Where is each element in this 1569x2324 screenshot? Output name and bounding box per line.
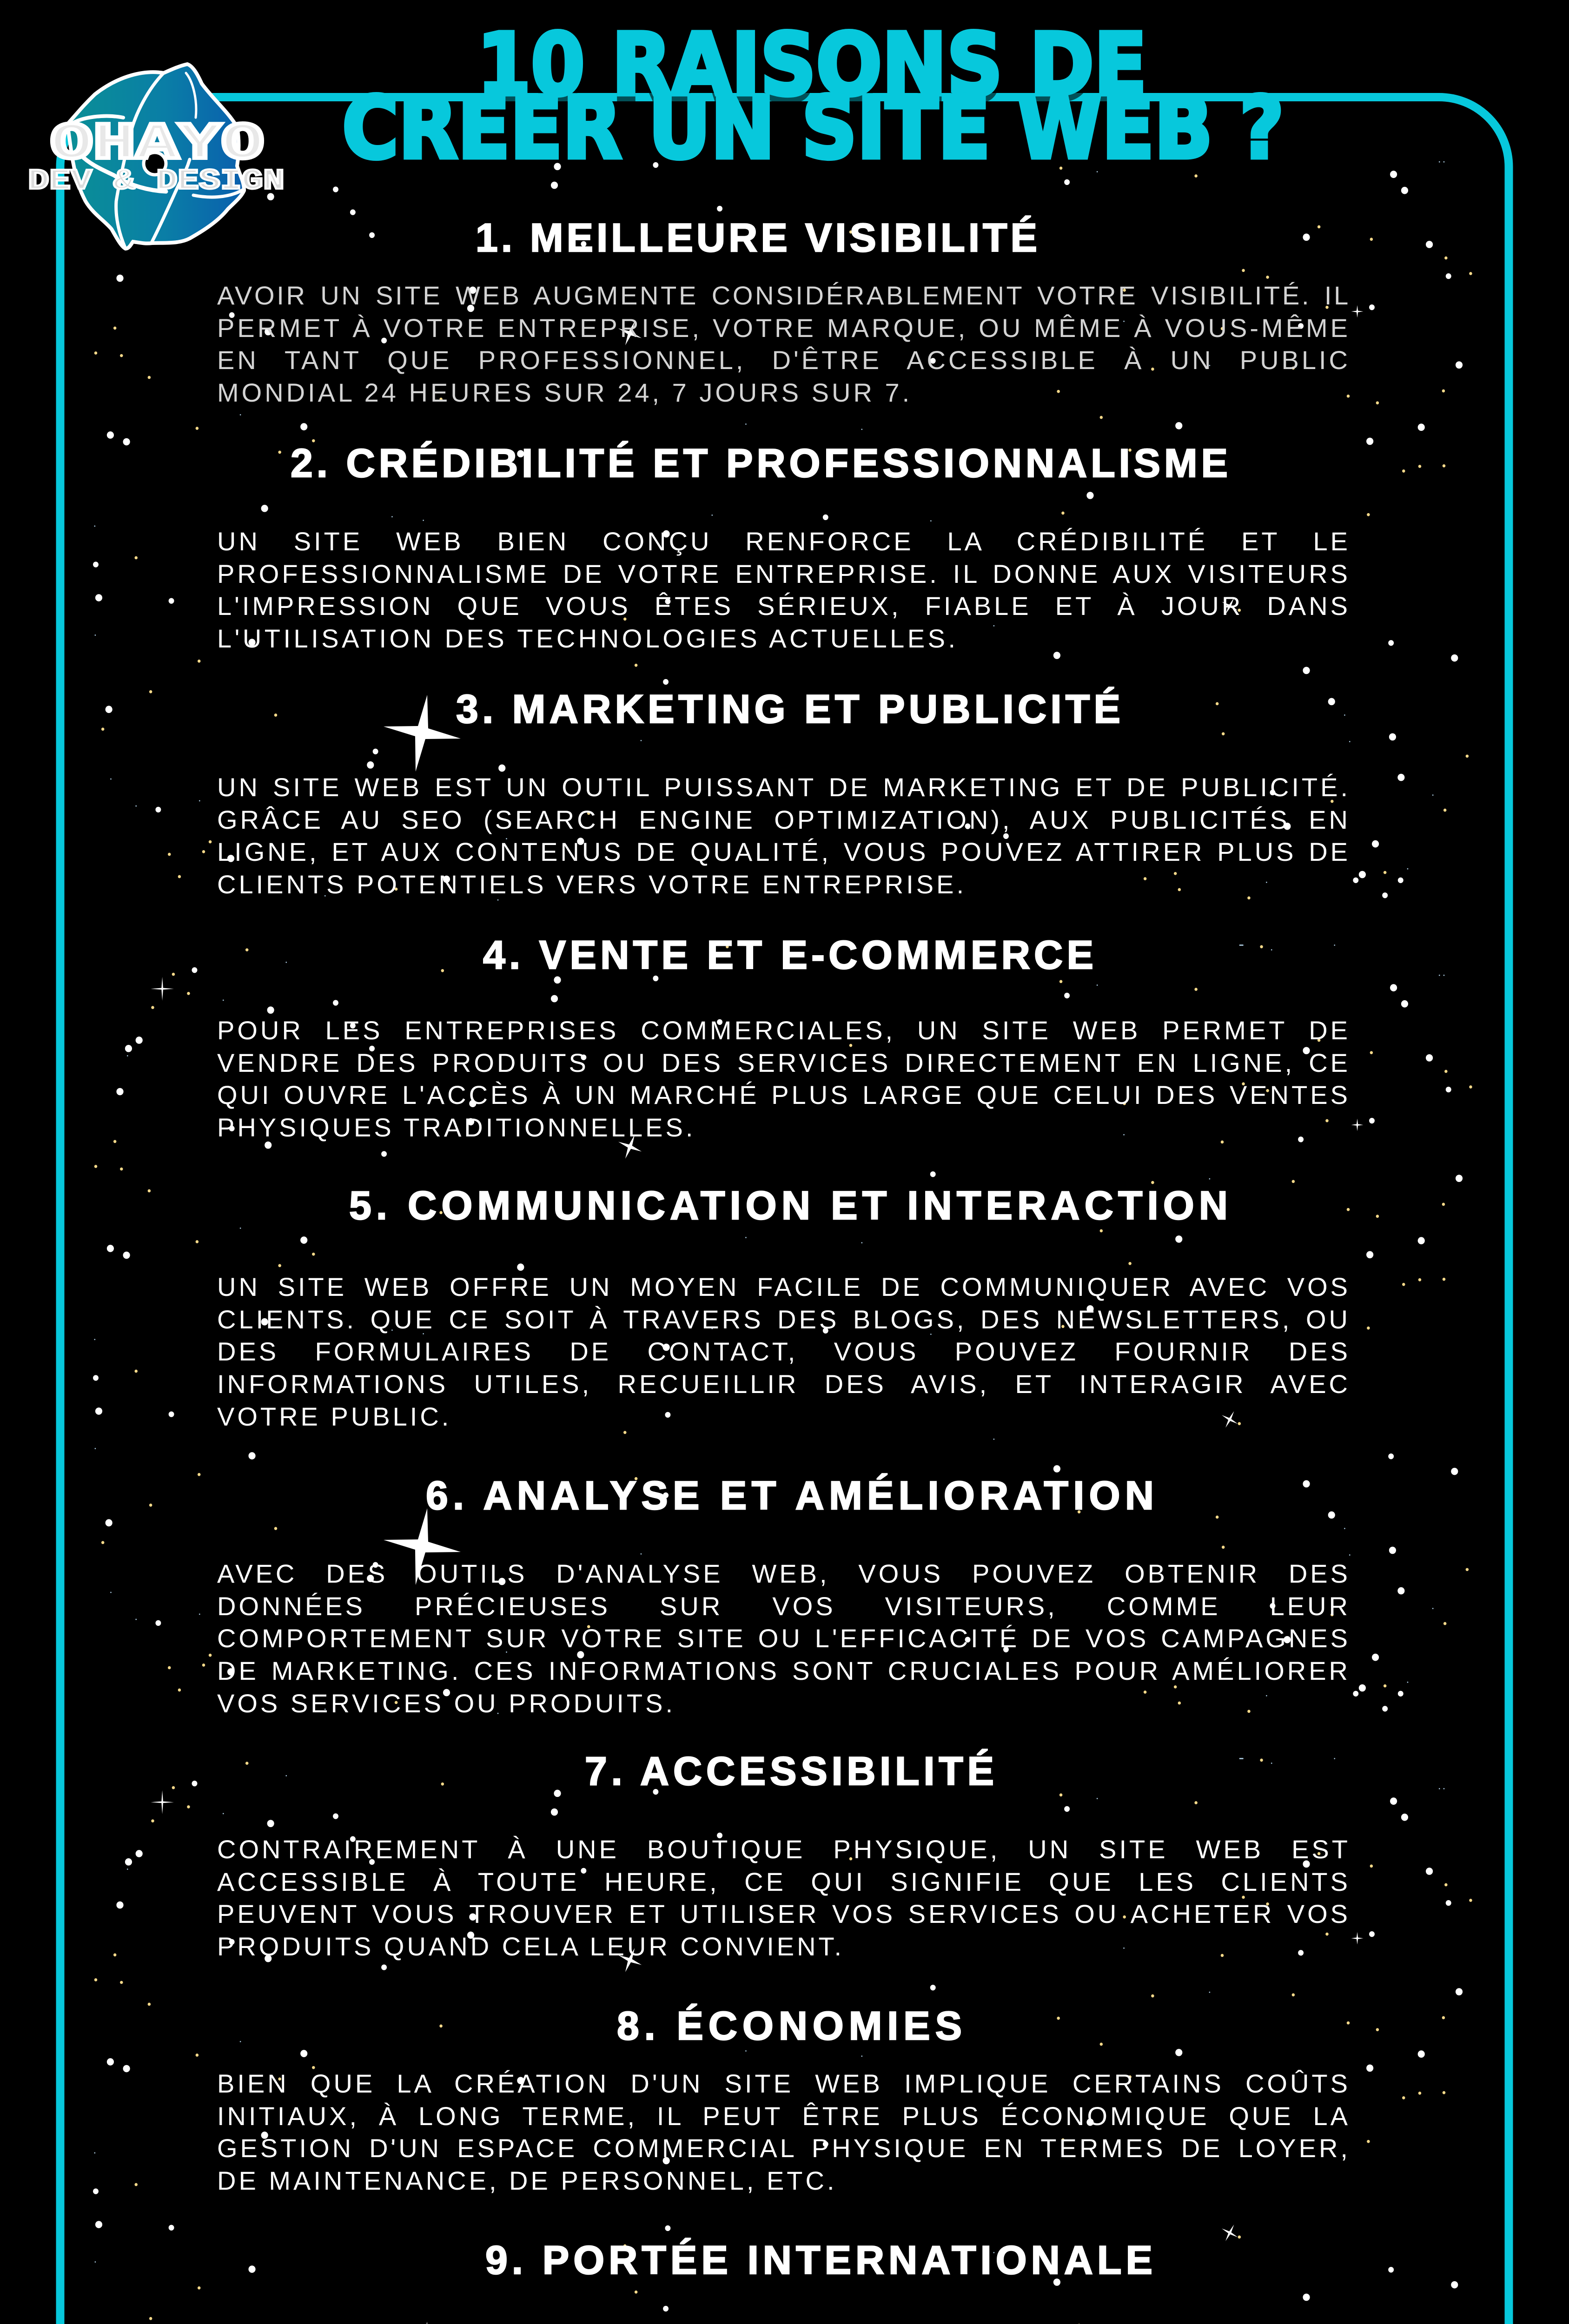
paragraph 2: UN SITE WEB BIEN CONÇU RENFORCE LA CRÉDIBILITÉ ET LE xyxy=(217,527,1351,556)
paragraph 4: POUR LES ENTREPRISES COMMERCIALES, UN SITE WEB PERMET DE xyxy=(217,1016,1351,1045)
paragraph 3: CLIENTS POTENTIELS VERS VOTRE ENTREPRISE. xyxy=(217,870,967,899)
title line 1: 10 RAISONS DE xyxy=(477,15,1147,115)
paragraph 7: PEUVENT VOUS TROUVER ET UTILISER VOS SERVICES OU ACHETER VOS xyxy=(217,1899,1351,1928)
starfield: first tile lower band xyxy=(96,945,1470,1267)
paragraph 4: PHYSIQUES TRADITIONNELLES. xyxy=(217,1113,695,1142)
heading 8: 8. ÉCONOMIES xyxy=(617,2004,962,2048)
paragraph 2: PROFESSIONNALISME DE VOTRE ENTREPRISE. IL DONNE AUX VISITEURS xyxy=(217,559,1351,588)
paragraph 4: VENDRE DES PRODUITS OU DES SERVICES DIRECTEMENT EN LIGNE, CE xyxy=(217,1048,1351,1077)
paragraph 7: CONTRAIREMENT À UNE BOUTIQUE PHYSIQUE, UN SITE WEB EST xyxy=(217,1835,1351,1864)
paragraph 5: VOTRE PUBLIC. xyxy=(217,1402,451,1431)
heading 4: 4. VENTE ET E-COMMERCE xyxy=(483,933,1093,977)
heading 3: 3. MARKETING ET PUBLICITÉ xyxy=(456,687,1120,732)
paragraph 8 xyxy=(217,2067,1351,2197)
paragraph 8: DE MAINTENANCE, DE PERSONNEL, ETC. xyxy=(217,2166,837,2195)
paragraph 8: GESTION D'UN ESPACE COMMERCIAL PHYSIQUE EN TERMES DE LOYER, xyxy=(217,2133,1351,2163)
paragraph 7: PRODUITS QUAND CELA LEUR CONVIENT. xyxy=(217,1932,844,1961)
paragraph 2: L'UTILISATION DES TECHNOLOGIES ACTUELLES. xyxy=(217,624,959,653)
paragraph 6: VOS SERVICES OU PRODUITS. xyxy=(217,1689,675,1718)
logo hole xyxy=(144,152,166,175)
logo: Ohayo globe xyxy=(28,64,285,249)
paragraph 6 xyxy=(217,1558,1351,1720)
paragraph 6: AVEC DES OUTILS D'ANALYSE WEB, VOUS POUVEZ OBTENIR DES xyxy=(217,1559,1351,1588)
paragraph 6: DE MARKETING. CES INFORMATIONS SONT CRUCIALES POUR AMÉLIORER xyxy=(217,1656,1351,1685)
paragraph 5 xyxy=(217,1271,1351,1433)
paragraph 1: MONDIAL 24 HEURES SUR 24, 7 JOURS SUR 7. xyxy=(217,378,912,407)
logo tagline: DEV & DESIGN xyxy=(28,165,285,198)
paragraph 6: COMPORTEMENT SUR VOTRE SITE OU L'EFFICACITÉ DE VOS CAMPAGNES xyxy=(217,1624,1351,1653)
paragraph 5: DES FORMULAIRES DE CONTACT, VOUS POUVEZ FOURNIR DES xyxy=(217,1337,1351,1366)
paragraph 3: UN SITE WEB EST UN OUTIL PUISSANT DE MARKETING ET DE PUBLICITÉ. xyxy=(217,772,1351,802)
paragraph 1 xyxy=(217,279,1351,409)
paragraph 3: GRÂCE AU SEO (SEARCH ENGINE OPTIMIZATION), AUX PUBLICITÉS EN xyxy=(217,805,1351,834)
paragraph 2 xyxy=(217,525,1351,655)
paragraph 8: INITIAUX, À LONG TERME, IL PEUT ÊTRE PLUS ÉCONOMIQUE QUE LA xyxy=(217,2101,1351,2131)
paragraph 3: LIGNE, ET AUX CONTENUS DE QUALITÉ, VOUS POUVEZ ATTIRER PLUS DE xyxy=(217,837,1351,866)
globe meridians and swooshes xyxy=(71,73,244,249)
starfield: second tile lower band xyxy=(96,1759,1470,2080)
heading 2: 2. CRÉDIBILITÉ ET PROFESSIONNALISME xyxy=(291,441,1228,486)
globe body xyxy=(67,64,244,249)
starfield: bottom band xyxy=(106,2291,1478,2324)
heading 7: 7. ACCESSIBILITÉ xyxy=(585,1749,994,1794)
paragraph 4 xyxy=(217,1014,1351,1144)
paragraph 8: BIEN QUE LA CRÉATION D'UN SITE WEB IMPLIQUE CERTAINS COÛTS xyxy=(217,2069,1351,2098)
heading 5: 5. COMMUNICATION ET INTERACTION xyxy=(349,1183,1228,1228)
paragraph 1: AVOIR UN SITE WEB AUGMENTE CONSIDÉRABLEMENT VOTRE VISIBILITÉ. IL xyxy=(217,281,1351,310)
starfield: top band xyxy=(96,132,1470,454)
logo wordmark OHAYO: OHAYO xyxy=(50,115,264,174)
title line 2: CREER UN SITE WEB ? xyxy=(342,79,1284,178)
paragraph 6: DONNÉES PRÉCIEUSES SUR VOS VISITEURS, COMME LEUR xyxy=(217,1591,1351,1621)
paragraph 7 xyxy=(217,1833,1351,1963)
heading 6: 6. ANALYSE ET AMÉLIORATION xyxy=(426,1473,1154,1518)
starfield: third tile upper band xyxy=(95,2093,1467,2324)
starfield: first tile upper band xyxy=(95,466,1467,900)
heading 9: 9. PORTÉE INTERNATIONALE xyxy=(485,2238,1152,2283)
paragraph 1: EN TANT QUE PROFESSIONNEL, D'ÊTRE ACCESSIBLE À UN PUBLIC xyxy=(217,345,1351,375)
paragraph 3 xyxy=(217,771,1351,901)
heading 1: 1. MEILLEURE VISIBILITÉ xyxy=(476,216,1037,260)
title xyxy=(342,15,1284,178)
paragraph 5: UN SITE WEB OFFRE UN MOYEN FACILE DE COMMUNIQUER AVEC VOS xyxy=(217,1272,1351,1301)
starfield: second tile upper band xyxy=(95,1279,1467,1713)
paragraph 4: QUI OUVRE L'ACCÈS À UN MARCHÉ PLUS LARGE QUE CELUI DES VENTES xyxy=(217,1080,1351,1109)
paragraph 1: PERMET À VOTRE ENTREPRISE, VOTRE MARQUE, OU MÊME À VOUS-MÊME xyxy=(217,313,1351,343)
paragraph 5: INFORMATIONS UTILES, RECUEILLIR DES AVIS, ET INTERAGIR AVEC xyxy=(217,1369,1351,1399)
paragraph 2: L'IMPRESSION QUE VOUS ÊTES SÉRIEUX, FIABLE ET À JOUR DANS xyxy=(217,591,1351,621)
paragraph 5: CLIENTS. QUE CE SOIT À TRAVERS DES BLOGS, DES NEWSLETTERS, OU xyxy=(217,1305,1351,1334)
paragraph 7: ACCESSIBLE À TOUTE HEURE, CE QUI SIGNIFIE QUE LES CLIENTS xyxy=(217,1867,1351,1896)
